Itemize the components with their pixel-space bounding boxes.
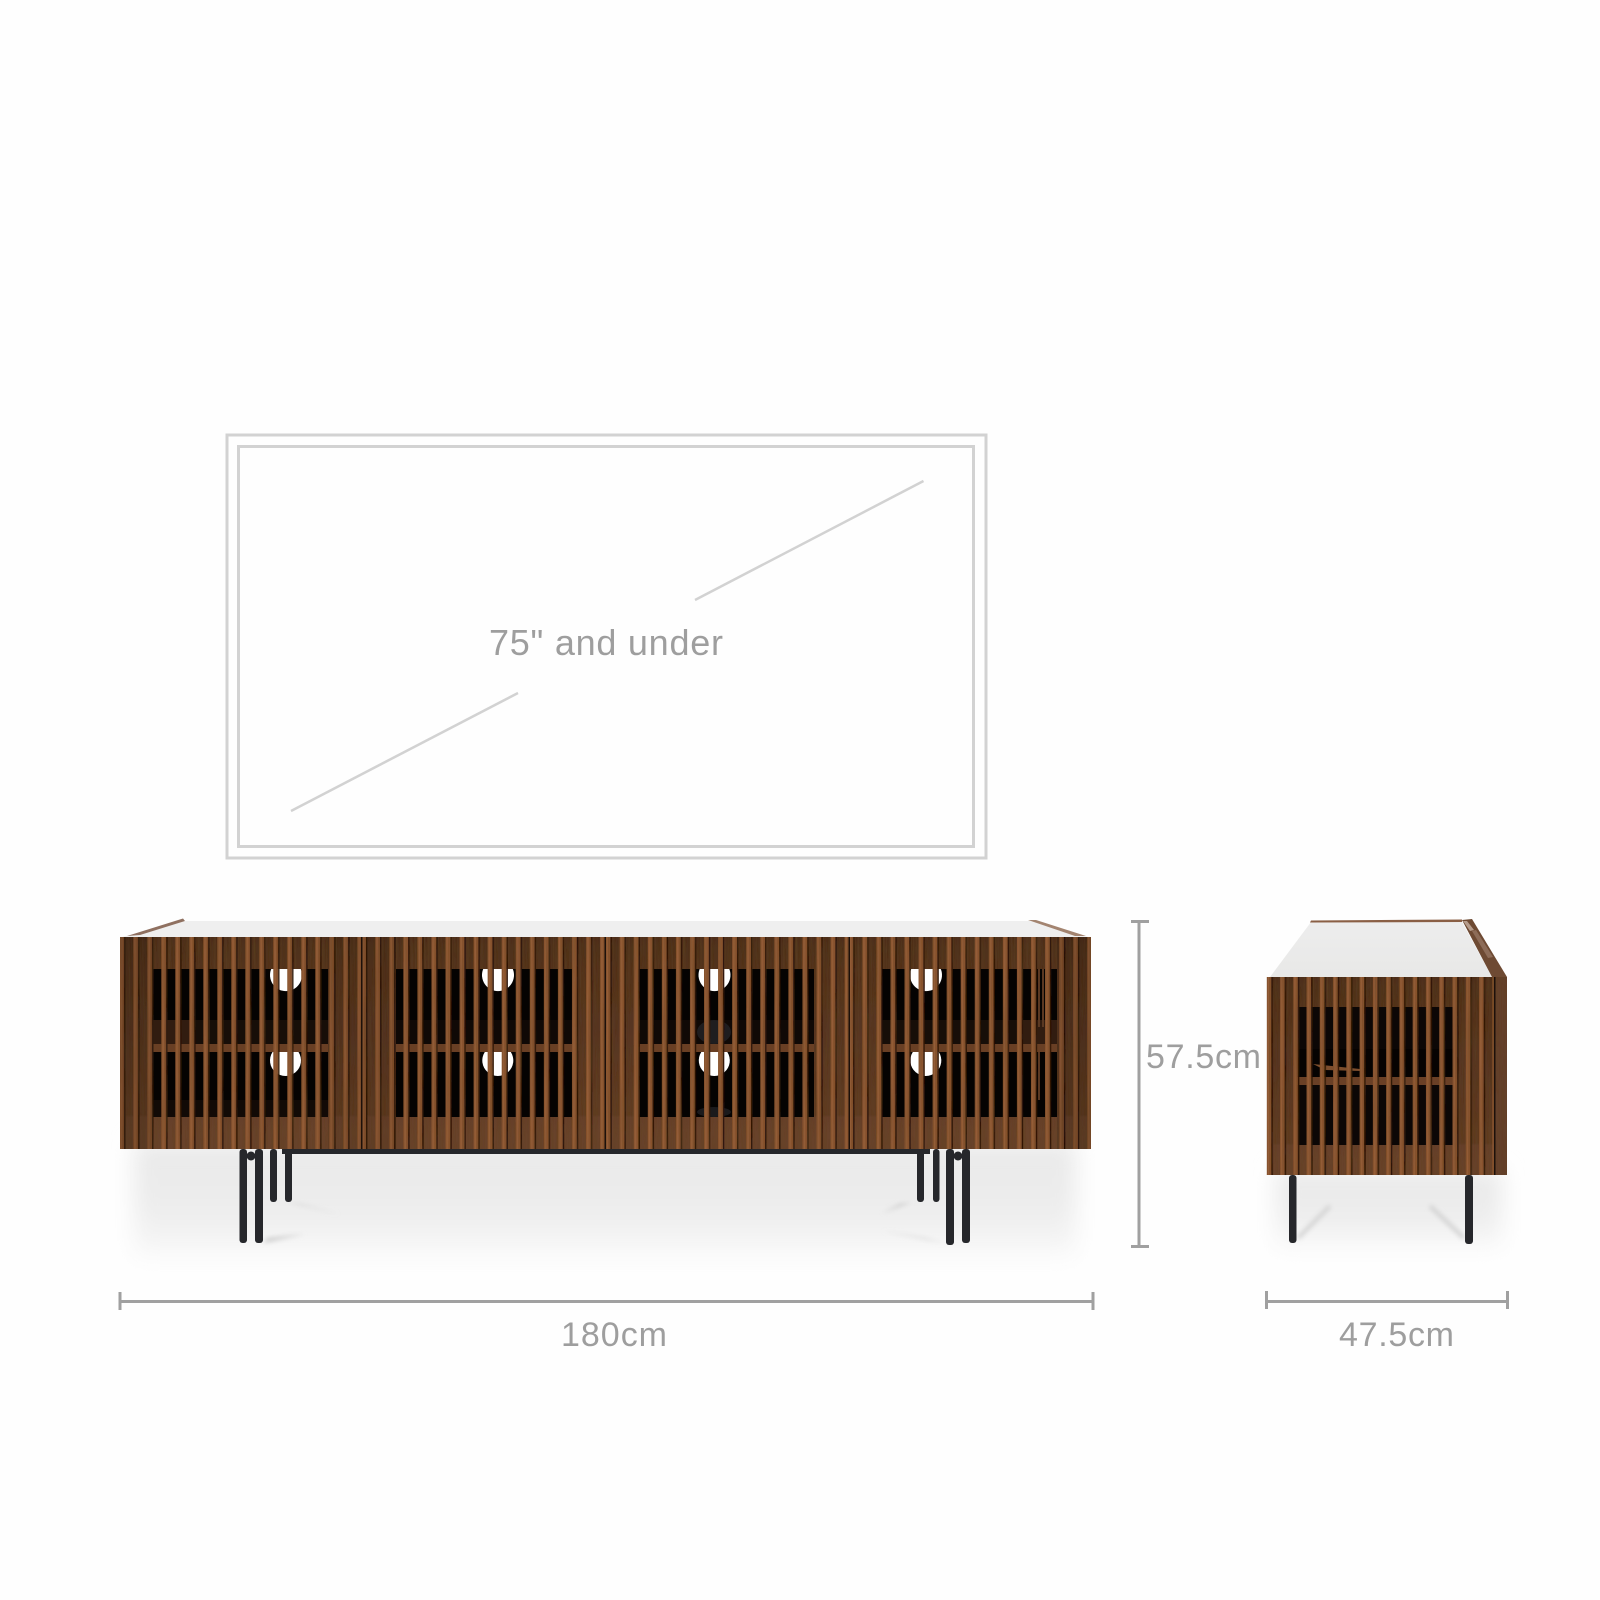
dimension: depth 47.5cm: 47.5cm [1339,1316,1454,1354]
dimension: height 57.5cm: 57.5cm [1146,1038,1261,1076]
side view legs [1289,1175,1473,1244]
door window 3 [638,969,814,1117]
door seams and darker frame columns [120,937,1091,1149]
dimension: width 180cm [118,1292,1094,1354]
side view marble top [1270,922,1492,977]
vertical wood slats [120,937,1091,1149]
side view window [1297,1007,1457,1145]
side view shadow [1276,1170,1502,1250]
front view: media unit [120,918,1091,1245]
side view right wood edge [1462,919,1507,977]
dimension: height 57.5cm [1131,920,1261,1248]
side view end panel [1494,977,1507,1175]
TV inner screen [238,446,974,846]
marble top [122,921,1088,937]
TV diagonal upper segment [695,481,924,600]
side view back wood edge [1310,920,1462,922]
side view slats [1267,977,1494,1175]
left top wood edge [127,918,185,936]
TV outline: 75 inch and under [227,435,986,858]
right top wood edge [1028,920,1086,936]
dimension: depth 47.5cm [1265,1291,1509,1354]
front view shadow [134,1142,1076,1260]
TV size label: 75" and under [489,622,723,663]
door window 2 [396,969,572,1117]
legs and rail [240,1149,970,1245]
side view body [1267,977,1507,1175]
dimension: width 180cm: 180cm [561,1316,667,1354]
door window 1 [153,969,328,1117]
door window 4 [882,969,1057,1117]
TV diagonal lower segment [291,693,518,811]
side view: media unit [1267,919,1507,1244]
cabinet body [120,937,1091,1149]
TV outer frame [227,435,986,858]
